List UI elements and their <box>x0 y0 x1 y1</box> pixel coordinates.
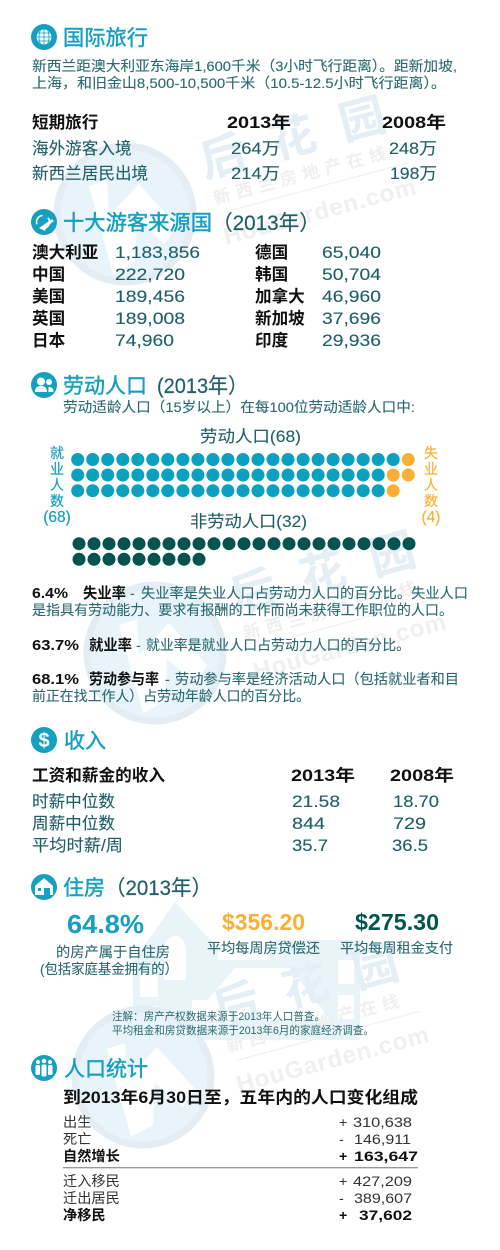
heading: population statistics: 人口统计 <box>64 1058 148 1081</box>
stat: owner occupied: 的房产属于自住房 <box>56 945 170 961</box>
table: net migration: 389,607 <box>354 1191 412 1207</box>
table: net migration: 37,602 <box>359 1208 412 1224</box>
table: countries: 222,720 <box>115 265 185 284</box>
table: countries: 189,456 <box>115 287 185 306</box>
table: natural increase: 310,638 <box>353 1115 412 1131</box>
heading: housing: 住房 <box>63 877 105 900</box>
table: short-term travel: 2008年 <box>382 112 446 132</box>
label: employed: 数 <box>50 493 64 509</box>
table: countries: 德国 <box>255 243 288 262</box>
table: net migration: + <box>339 1208 347 1224</box>
text block: distance: 新西兰距澳大利亚东海岸1,600千米（3小时飞行距离）。距新加坡, <box>32 58 457 75</box>
label: employed: 人 <box>50 477 64 493</box>
table: natural increase: + <box>339 1149 347 1165</box>
note <box>112 1009 374 1037</box>
stat: owner occupied <box>40 909 178 978</box>
icon: dollar <box>31 727 57 753</box>
text block: participation rate: 劳动参与率 <box>89 670 159 688</box>
chart: not in labour force dots <box>72 537 416 566</box>
section: labour force <box>31 372 468 705</box>
table: income: 时薪中位数 <box>32 792 115 811</box>
stat: owner occupied: (包括家庭基金拥有的） <box>40 961 178 978</box>
watermark: top logo: 新西兰房地产在线 <box>211 143 388 208</box>
table: countries: 新加坡 <box>255 308 305 328</box>
heading: top ten source countries: （2013年） <box>212 212 320 235</box>
table: countries: 37,696 <box>322 309 381 328</box>
table: countries: 189,008 <box>115 309 185 328</box>
label: employed <box>43 445 71 526</box>
stat: mortgage repayment: 平均每周房贷偿还 <box>207 941 320 957</box>
heading: labour force: 劳动人口 <box>63 375 147 398</box>
text block: employment rate: 63.7% <box>32 638 79 654</box>
table: countries: 韩国 <box>255 265 288 284</box>
section: housing <box>31 874 453 1037</box>
table: countries: 74,960 <box>115 331 174 350</box>
text block: employment rate: 就业率是就业人口占劳动力人口的百分比。 <box>146 637 410 654</box>
table: income: 21.58 <box>292 792 340 811</box>
heading: top ten source countries: 十大游客来源国 <box>63 212 212 235</box>
text block: participation rate: 前正在找工作人）占劳动年龄人口的百分比。 <box>32 688 310 705</box>
table: countries: 日本 <box>32 331 66 350</box>
section: population statistics <box>31 1055 418 1224</box>
watermark: lower logo: HouGarden.com <box>234 1021 432 1099</box>
icon: house <box>31 874 57 900</box>
table: natural increase: 出生 <box>63 1115 91 1131</box>
section: top ten source countries <box>31 209 381 350</box>
table: income: 2008年 <box>390 765 454 785</box>
table: countries: 29,936 <box>322 331 381 350</box>
table: net migration: 迁出居民 <box>63 1191 120 1207</box>
section: international travel <box>31 24 457 183</box>
text block: participation rate <box>32 670 459 705</box>
table: net migration: + <box>339 1174 347 1190</box>
watermark: house outline <box>133 902 360 1040</box>
icon: people <box>31 372 57 398</box>
stat: weekly rent: $275.30 <box>355 909 439 935</box>
icon: plane <box>31 209 57 235</box>
table: countries: 印度 <box>255 331 289 350</box>
heading: housing: （2013年） <box>105 877 212 900</box>
table: net migration: 427,209 <box>353 1174 412 1190</box>
label: unemployed: 人 <box>424 477 438 493</box>
table: income: 工资和薪金的收入 <box>32 765 165 785</box>
chart: employed dots <box>71 453 400 497</box>
table: short-term travel <box>32 112 446 183</box>
label: employed: 就 <box>50 445 64 461</box>
table: countries: 50,704 <box>322 265 381 284</box>
table: income: 35.7 <box>292 836 328 855</box>
stat: owner occupied: 64.8% <box>67 909 144 939</box>
table: countries: 65,040 <box>322 243 381 262</box>
table: countries: 1,183,856 <box>115 243 200 262</box>
label: unemployed: 数 <box>424 493 438 509</box>
text block: unemployment rate: 6.4% <box>32 586 68 602</box>
text block: participation rate: 劳动参与率是经济活动人口（包括就业者和目 <box>175 671 459 688</box>
table: natural increase: - <box>339 1132 344 1148</box>
table: income: 2013年 <box>291 765 355 785</box>
watermark: top logo: HouGarden.com <box>221 173 419 251</box>
table: natural increase: 死亡 <box>63 1132 91 1148</box>
text block: unemployment rate: - <box>130 586 135 602</box>
table: short-term travel: 264万 <box>231 139 280 158</box>
text block: employment rate: - <box>136 638 141 654</box>
table: countries: 美国 <box>32 286 65 306</box>
label: labour force 68: 劳动人口(68) <box>200 427 301 446</box>
icon: globe <box>31 24 57 50</box>
label: not in labour force 32: 非劳动人口(32) <box>190 512 307 531</box>
table: countries: 英国 <box>32 308 65 328</box>
label: unemployed: 失 <box>424 445 438 461</box>
table: natural increase <box>63 1115 418 1165</box>
table: income: 18.70 <box>393 792 439 811</box>
text block: unemployment rate: 是指具有劳动能力、要求有报酬的工作而尚未获得工作职位的人口。 <box>32 602 453 619</box>
watermark: middle logo <box>87 520 449 721</box>
text block: unemployment rate: 失业率 <box>83 584 126 602</box>
table: short-term travel: 214万 <box>231 164 280 183</box>
heading: international travel: 国际旅行 <box>63 27 148 50</box>
table: countries: 46,960 <box>322 287 381 306</box>
table: countries: 中国 <box>32 265 65 284</box>
watermark: top logo: 后花园 <box>194 88 391 188</box>
text block: employment rate: 就业率 <box>89 636 132 654</box>
icon: group of people <box>31 1055 57 1081</box>
label: employed: 业 <box>50 461 64 477</box>
label: unemployed: 业 <box>424 461 438 477</box>
table: income: 周薪中位数 <box>32 814 115 833</box>
text block: labour intro: 劳动适龄人口（15岁以上）在每100位劳动适龄人口中: <box>63 400 415 416</box>
table: natural increase: 自然增长 <box>63 1148 120 1165</box>
text block: employment rate <box>32 636 410 654</box>
text block: participation rate: - <box>165 672 170 688</box>
stat: mortgage repayment <box>207 909 320 957</box>
table: income <box>32 765 454 855</box>
divider <box>63 1167 418 1169</box>
watermark: middle logo: 后花园 <box>224 523 421 623</box>
table: short-term travel: 198万 <box>390 164 437 183</box>
text block: unemployment rate <box>32 584 468 619</box>
watermark: middle logo: 新西兰房地产在线 <box>241 578 418 643</box>
watermark: lower logo <box>75 933 432 1145</box>
stat: weekly rent: 平均每周租金支付 <box>340 941 453 957</box>
table: income: 平均时薪/周 <box>32 836 123 855</box>
heading: top ten source countries <box>63 212 320 235</box>
heading: labour force <box>63 375 248 398</box>
heading: labour force: (2013年） <box>157 375 248 398</box>
text block: distance <box>32 58 457 92</box>
watermark: lower logo: 后花园 <box>207 936 404 1036</box>
table: short-term travel: 海外游客入境 <box>32 139 132 158</box>
text block: participation rate: 68.1% <box>32 672 79 688</box>
table: short-term travel: 短期旅行 <box>32 113 98 132</box>
text block: distance: 上海，和旧金山8,500-10,500千米（10.5-12.5小时飞行距离）。 <box>32 75 446 92</box>
table heading: 到2013年6月30日至，五年内的人口变化组成 <box>63 1087 418 1107</box>
heading: income: 收入 <box>64 730 106 753</box>
stat: weekly rent <box>340 909 453 957</box>
table: income: 729 <box>393 814 426 833</box>
label: employed: (68) <box>43 509 71 526</box>
table: income: 36.5 <box>392 836 428 855</box>
section: income <box>31 727 454 855</box>
label: unemployed <box>422 445 440 526</box>
table: short-term travel: 248万 <box>389 139 437 158</box>
table: countries: 澳大利亚 <box>32 243 98 262</box>
table: natural increase: + <box>339 1115 347 1131</box>
table: countries <box>32 243 381 350</box>
table: net migration: 净移民 <box>63 1208 106 1224</box>
table: net migration: 迁入移民 <box>63 1174 120 1190</box>
text block: unemployment rate: 失业率是失业人口占劳动力人口的百分比。失业人口 <box>141 585 468 602</box>
note: 平均租金和房贷数据来源于2013年6月的家庭经济调查。 <box>112 1023 374 1037</box>
table: countries: 加拿大 <box>255 286 305 306</box>
table: natural increase: 146,911 <box>354 1132 411 1148</box>
watermark: middle logo: HouGarden.com <box>251 608 449 686</box>
table: natural increase: 163,647 <box>354 1149 418 1165</box>
label: unemployed: (4) <box>422 509 440 526</box>
table: short-term travel: 新西兰居民出境 <box>32 164 148 183</box>
chart: unemployed dots <box>387 453 415 497</box>
note: 注解：房产产权数据来源于2013年人口普查。 <box>112 1009 325 1023</box>
table: net migration <box>63 1174 412 1224</box>
watermark: top logo <box>57 85 419 282</box>
icon: dollar: $ <box>38 730 50 752</box>
table: short-term travel: 2013年 <box>227 112 291 132</box>
stat: mortgage repayment: $356.20 <box>222 909 305 935</box>
watermark: lower logo: 新西兰房地产在线 <box>224 991 401 1056</box>
table: net migration: - <box>339 1191 344 1207</box>
table: income: 844 <box>292 814 325 833</box>
